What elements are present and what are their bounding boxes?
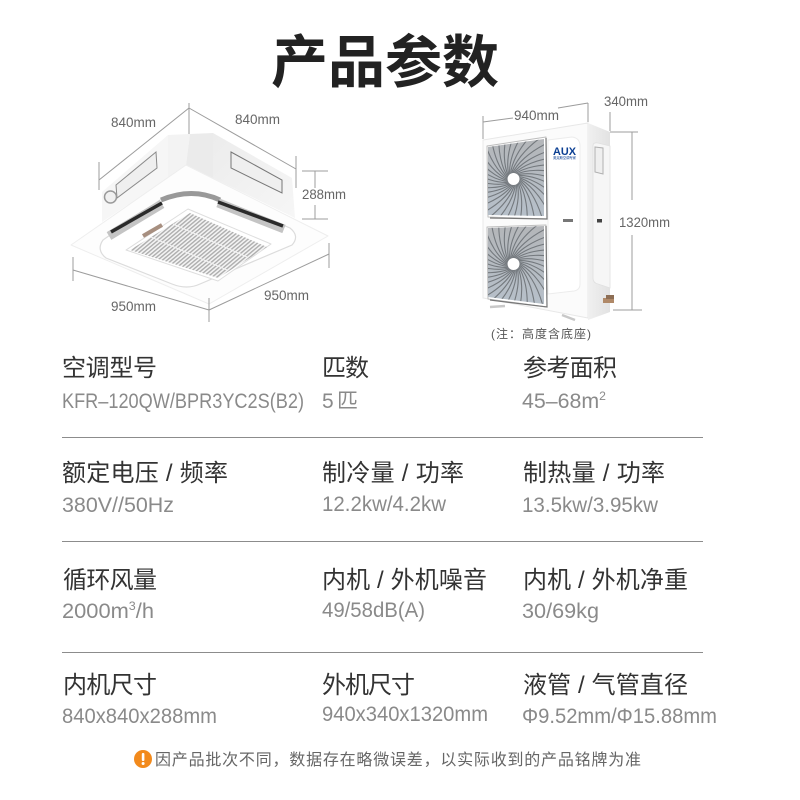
grille seams xyxy=(151,224,247,270)
spec: model: KFR–120QW/BPR3YC2S(B2) xyxy=(62,390,304,413)
spec: voltage: 380V//50Hz xyxy=(62,494,174,517)
outdoor unit side xyxy=(588,123,610,320)
indoor unit corner face light xyxy=(168,134,190,178)
height note: (注：高度含底座) xyxy=(491,326,591,341)
front handle xyxy=(563,219,573,222)
title: 产品参数 xyxy=(271,31,499,95)
left louver xyxy=(109,204,162,236)
upper fan xyxy=(486,136,548,220)
dimension labels indoor: 950mm xyxy=(111,299,156,314)
dimension labels indoor: 840mm xyxy=(235,112,280,127)
spec: area: 2 xyxy=(599,389,606,403)
diagram: outdoor unit xyxy=(482,96,670,340)
divider 2 xyxy=(62,540,703,542)
front raised panel xyxy=(548,137,580,294)
spec: outdoor size: 外机尺寸 xyxy=(322,672,415,699)
side handle xyxy=(595,147,603,174)
spec: outdoor size xyxy=(322,672,488,726)
AUX logo: AUX xyxy=(553,146,577,158)
footnote xyxy=(134,750,641,769)
footnote text: 因产品批次不同，数据存在略微误差，以实际收到的产品铭牌为准 xyxy=(155,751,641,769)
spec: cooling xyxy=(322,460,464,516)
lower fan xyxy=(486,224,548,308)
spec: horsepower: 匹数 xyxy=(322,355,369,382)
spec: pipe diameter: Φ9.52mm/Φ15.88mm xyxy=(522,705,717,728)
spec: indoor size: 内机尺寸 xyxy=(63,672,157,699)
right louver xyxy=(218,203,284,229)
spec: area xyxy=(522,355,617,413)
top corner trim xyxy=(161,194,220,200)
dimension labels outdoor: 1320mm xyxy=(619,215,670,230)
round port xyxy=(104,191,116,203)
spec row 3 xyxy=(62,567,688,623)
outdoor unit front xyxy=(483,123,588,318)
divider 3 xyxy=(62,652,703,654)
ceiling panel xyxy=(71,165,328,304)
spec row 2 xyxy=(62,460,665,517)
spec: voltage: 额定电压 / 频率 xyxy=(62,460,228,487)
refrigerant valves xyxy=(603,295,614,303)
dimension labels outdoor: 940mm xyxy=(514,108,559,123)
divider 1 xyxy=(62,436,703,438)
spec: airflow: /h xyxy=(136,600,154,623)
dimension labels indoor: 840mm xyxy=(111,115,156,130)
spec: indoor size xyxy=(62,672,217,728)
dimension labels outdoor: 340mm xyxy=(604,94,648,109)
spec: area: 参考面积 xyxy=(523,355,617,382)
dimension lines outdoor xyxy=(483,103,642,310)
spec: airflow: 3 xyxy=(129,599,136,613)
spec row 4 xyxy=(62,672,717,728)
spec: outdoor size: 940x340x1320mm xyxy=(322,703,488,726)
panel inner ring xyxy=(100,193,296,287)
left vent xyxy=(116,152,157,198)
diagram: indoor cassette unit xyxy=(71,103,346,322)
spec row 1 xyxy=(62,355,617,413)
spec: cooling: 制冷量 / 功率 xyxy=(322,460,464,487)
side small port xyxy=(597,219,602,222)
icon: warning xyxy=(134,750,152,768)
spec: pipe diameter: 液管 / 气管直径 xyxy=(523,672,688,699)
display strip xyxy=(143,225,162,236)
base feet xyxy=(490,306,575,320)
spec: noise xyxy=(322,567,487,622)
spec: heating: 制热量 / 功率 xyxy=(523,460,665,487)
side raised panel xyxy=(593,143,610,288)
spec: area: 45–68m xyxy=(522,390,598,413)
indoor unit corner face dark xyxy=(186,133,213,178)
spec: horsepower: 5 匹 xyxy=(322,390,358,413)
spec: model xyxy=(62,355,304,413)
return air grille xyxy=(130,213,267,278)
spec: heating: 13.5kw/3.95kw xyxy=(522,494,659,517)
spec: airflow xyxy=(62,567,157,623)
dimension labels outdoor xyxy=(514,94,670,230)
spec: weight: 30/69kg xyxy=(522,600,599,623)
spec: noise: 内机 / 外机噪音 xyxy=(322,567,487,594)
indoor unit right side face xyxy=(213,133,295,218)
right vent xyxy=(231,152,282,193)
dimension lines indoor xyxy=(73,103,329,322)
spec: airflow: 2000m xyxy=(62,600,126,623)
spec: pipe diameter xyxy=(522,672,717,728)
spec: weight: 内机 / 外机净重 xyxy=(523,567,688,594)
spec: horsepower xyxy=(322,355,369,413)
dimension labels indoor: 288mm xyxy=(302,187,346,202)
spec: voltage xyxy=(62,460,228,517)
inner grille frame xyxy=(126,209,271,281)
spec: model: 空调型号 xyxy=(62,355,157,382)
dimension labels indoor: 950mm xyxy=(264,288,309,303)
dimension labels indoor xyxy=(111,112,346,314)
spec: heating xyxy=(522,460,665,517)
spec: airflow: 循环风量 xyxy=(63,567,157,594)
indoor unit left side face xyxy=(102,135,168,222)
AUX logo: 奥克斯空调专家 xyxy=(553,155,576,160)
spec: noise: 49/58dB(A) xyxy=(322,599,425,622)
spec: weight xyxy=(522,567,688,623)
spec: cooling: 12.2kw/4.2kw xyxy=(322,493,447,516)
spec: indoor size: 840x840x288mm xyxy=(62,705,217,728)
